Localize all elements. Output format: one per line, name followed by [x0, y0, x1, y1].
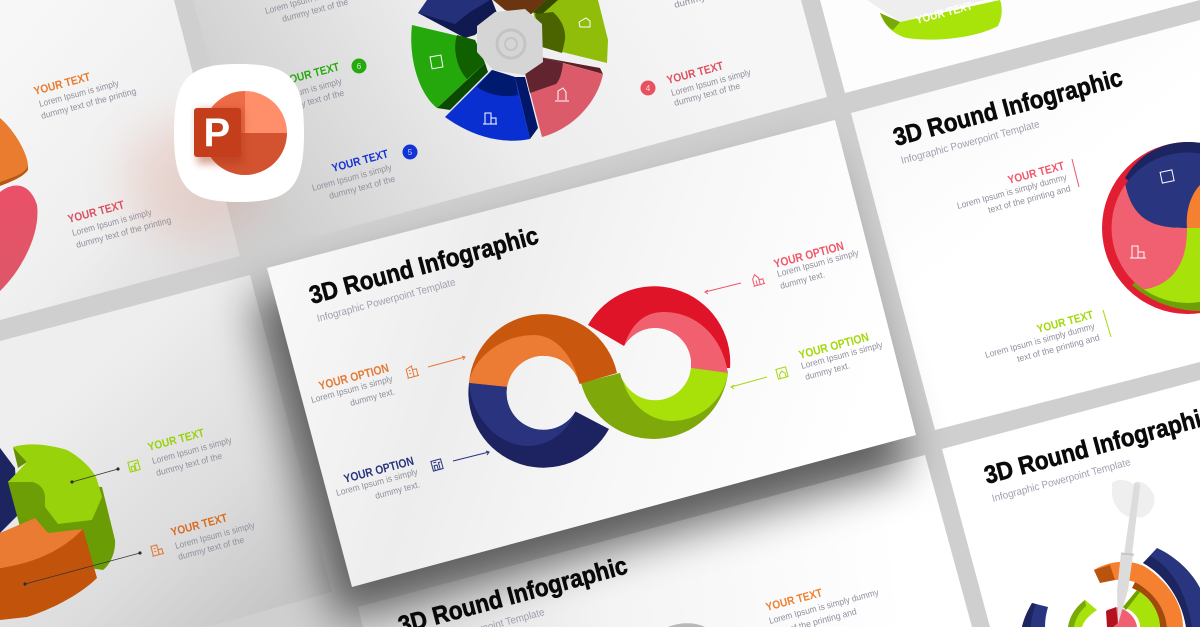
right slide text: lime: Lorem Ipsum is simply dummy [984, 321, 1096, 360]
right slide text: lime: text of the printing and [1016, 332, 1101, 364]
bottom right subtitle: Infographic Powerpoint Template [991, 456, 1132, 505]
left slide icon lime [128, 460, 140, 472]
top left text: red: Lorem Ipsum is simply [71, 207, 153, 238]
top left text: orange: Lorem Ipsum is simply [38, 78, 120, 109]
right slide text: red: text of the printing and [987, 183, 1072, 215]
top left text: red: dummy text of the printing [75, 215, 172, 250]
option: orange [310, 361, 396, 408]
segment: green [581, 368, 728, 439]
wheel chart [411, 0, 608, 141]
number badge 4: 4 [646, 84, 651, 93]
top centre text: red: dummy text of the [673, 81, 741, 108]
top left text: orange: dummy text of the printing [40, 86, 137, 121]
3D pie chart [0, 444, 141, 620]
top left chart wedges [0, 118, 37, 291]
top centre text: red [666, 60, 752, 108]
circular swirl chart [1102, 142, 1200, 314]
lime shape [880, 0, 1002, 40]
top centre text: blue: dummy text of the [328, 174, 396, 201]
top left text: red: YOUR TEXT [67, 199, 126, 226]
segment: navy [468, 383, 609, 468]
number badge 5 [402, 144, 418, 160]
leader lines [24, 468, 141, 585]
right slide text: red: Lorem Ipsum is simply dummy [956, 172, 1068, 211]
main subtitle: Infographic Powerpoint Template [316, 276, 457, 325]
main slide shadow [252, 155, 910, 622]
top centre text: red: YOUR TEXT [666, 60, 725, 87]
panel: top right slide [820, 0, 1200, 93]
logo circle [197, 91, 287, 175]
top centre text: green: dummy text of the [277, 88, 345, 115]
panel: bottom right slide [942, 380, 1200, 627]
option: orange: YOUR OPTION [317, 361, 390, 393]
left slide text orange: YOUR TEXT [170, 512, 229, 539]
wheel hub [477, 9, 543, 75]
left slide text lime [147, 427, 233, 478]
left slide icon orange [150, 544, 164, 556]
panel: top centre slide [193, 0, 827, 252]
segment: red [588, 286, 730, 373]
icon: red building [751, 273, 765, 286]
main title: 3D Round Infographic [306, 222, 542, 310]
top left text: red [67, 199, 172, 250]
segment: orange [469, 314, 617, 387]
option: navy: Lorem Ipsum is simply [335, 466, 419, 498]
icon: PowerPoint app [174, 64, 304, 202]
option: orange: dummy text. [349, 386, 396, 408]
option: orange: Lorem Ipsum is simply [310, 373, 394, 405]
wheel icons [430, 18, 590, 124]
icon: lime building [776, 367, 788, 379]
option: red [772, 239, 860, 291]
top centre text: blue [311, 148, 396, 201]
bottom slide text: Lorem Ipsum is simply dummy [768, 587, 880, 626]
arrow: orange [428, 356, 465, 367]
number badge 6: 6 [357, 62, 362, 71]
top centre text: blue: YOUR TEXT [331, 148, 390, 175]
arrow: red [705, 283, 741, 294]
chart icons [1130, 170, 1174, 258]
option: navy: dummy text. [374, 479, 421, 501]
right slide text: red: YOUR TEXT [1007, 160, 1066, 187]
panel: right middle slide [851, 20, 1200, 430]
top centre text: blue: Lorem Ipsum is simply [311, 162, 393, 193]
right slide subtitle: Infographic Powerpoint Template [900, 118, 1041, 167]
top centre text: red: Lorem Ipsum is simply [670, 67, 752, 98]
top centre text: green: Lorem Ipsum is simply [261, 76, 343, 107]
option: lime: YOUR OPTION [797, 330, 870, 362]
panel: left middle slide [0, 275, 332, 627]
top left text: orange [33, 71, 137, 121]
bottom slide text: YOUR TEXT [765, 587, 824, 614]
icon: orange building [405, 365, 419, 378]
left slide text orange: Lorem Ipsum is simply [174, 520, 256, 551]
logo P tile: P [204, 111, 230, 155]
panel: main slide [267, 120, 916, 587]
option: lime: dummy text. [804, 360, 851, 382]
option: red: dummy text. [779, 269, 826, 291]
icon: navy building [431, 459, 443, 471]
left slide text lime: dummy text of the [155, 451, 223, 478]
panel: top left slide [0, 0, 240, 320]
panel: bottom centre slide [358, 455, 972, 627]
left slide text orange [170, 512, 256, 562]
arrow: lime [731, 377, 767, 389]
top centre text: green [261, 61, 345, 115]
right slide title: 3D Round Infographic [890, 64, 1126, 152]
left slide text lime: YOUR TEXT [147, 427, 206, 454]
option: red: YOUR OPTION [772, 239, 845, 271]
number badge 4 [640, 80, 656, 96]
dart and target rings [1022, 480, 1200, 627]
arrow: navy [453, 451, 489, 461]
option: navy: YOUR OPTION [342, 454, 415, 486]
left slide text lime: Lorem Ipsum is simply [151, 435, 233, 466]
number badge 5: 5 [408, 148, 413, 157]
option: red: Lorem Ipsum is simply [776, 247, 860, 279]
number badge 6 [352, 58, 366, 74]
option: lime [797, 330, 884, 382]
top left text: orange: YOUR TEXT [33, 71, 92, 98]
right slide text: lime: YOUR TEXT [1036, 309, 1095, 336]
icon glow [125, 118, 265, 238]
option: lime: Lorem Ipsum is simply [800, 339, 884, 371]
option: navy [335, 454, 421, 501]
infinity chart [468, 286, 730, 468]
top centre text: green: YOUR TEXT [282, 61, 341, 88]
left slide text orange: dummy text of the [177, 535, 245, 562]
